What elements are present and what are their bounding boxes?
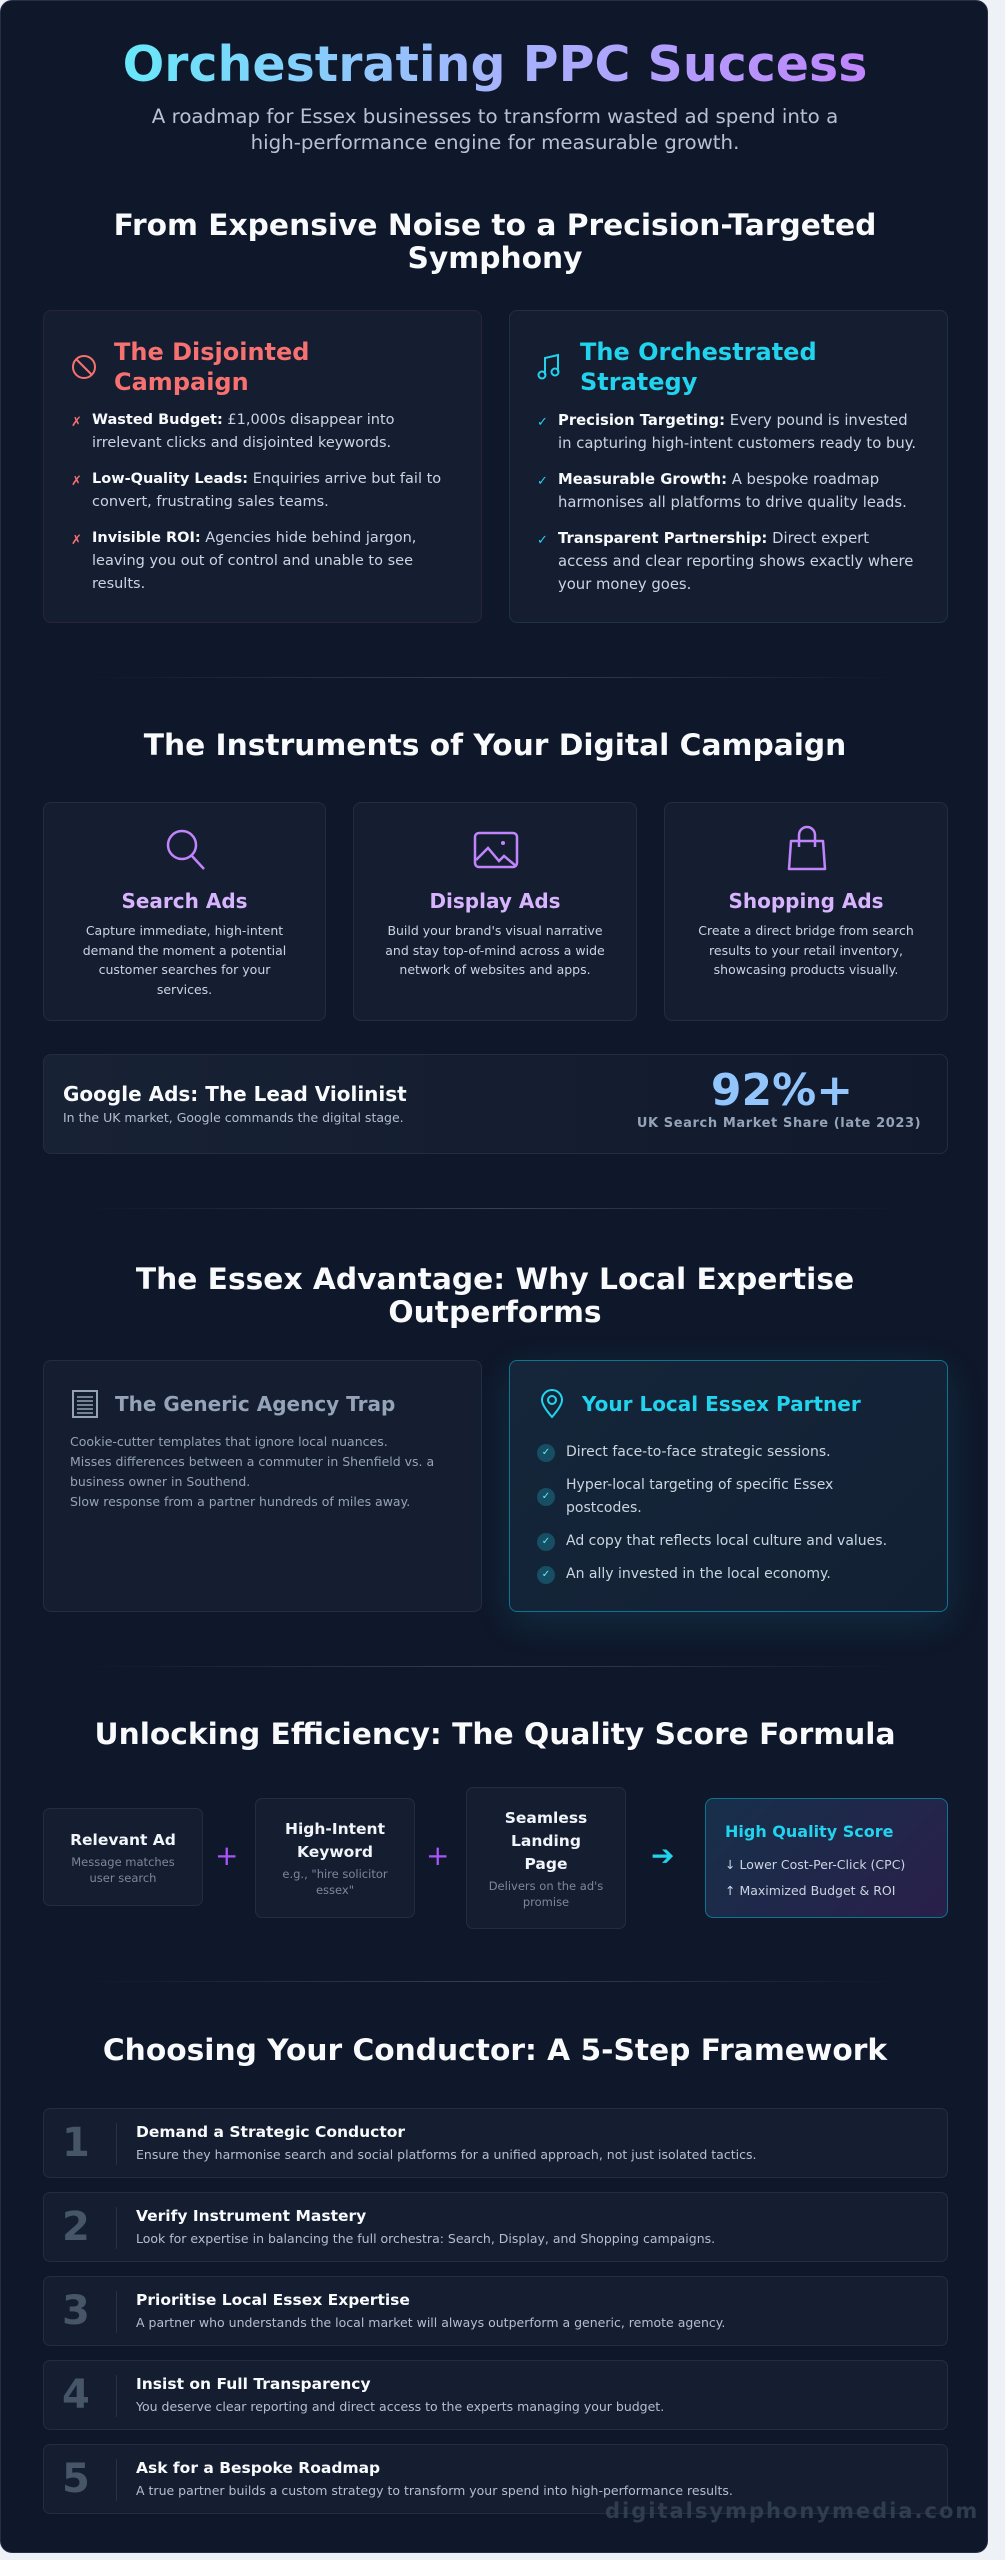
card: search ads xyxy=(43,802,326,1021)
text: Cookie-cutter templates that ignore local nuances. xyxy=(70,1434,388,1449)
formula: keyword: e.g., "hire solicitor xyxy=(282,1867,388,1881)
banner: google ads stat: In the UK market, Google commands the digital stage. xyxy=(63,1110,404,1125)
heading: from noise to symphony: Symphony xyxy=(408,241,582,276)
formula: relevant ad: user search xyxy=(90,1870,156,1884)
step 4: 4 xyxy=(62,2372,90,2418)
bullets: Measurable Growth: A bespoke roadmap xyxy=(558,471,879,488)
panel heading: The Orchestrated xyxy=(580,338,817,366)
subtitle: high-performance engine for measurable growth. xyxy=(251,131,739,154)
bullets: Invisible ROI: Agencies hide behind jargon, leaving you out of control and unable to see results. xyxy=(92,530,416,592)
step 3: Prioritise Local Essex Expertise xyxy=(136,2291,410,2309)
step 1: Demand a Strategic Conductor xyxy=(136,2123,405,2141)
icon: document xyxy=(72,1390,98,1418)
formula: landing page: promise xyxy=(523,1894,569,1908)
heading: The Generic Agency Trap xyxy=(115,1392,395,1416)
formula: result: ↓ Lower Cost-Per-Click (CPC) xyxy=(725,1857,905,1872)
bullets: ✗ xyxy=(71,533,82,548)
icon: music note xyxy=(538,354,560,380)
bullets xyxy=(537,412,916,593)
step 5 xyxy=(43,2444,948,2514)
heading: essex advantage: Outperforms xyxy=(388,1295,602,1330)
checklist: Hyper-local targeting of specific Essex postcodes. xyxy=(566,1477,833,1516)
formula: landing page: Landing xyxy=(511,1832,581,1850)
formula: result xyxy=(705,1798,948,1918)
banner text: Google Ads: The Lead Violinist xyxy=(63,1082,407,1106)
bullets: Precision Targeting: Every pound is invested xyxy=(558,412,908,429)
icon: map pin xyxy=(541,1389,563,1418)
formula: relevant ad: Message matches xyxy=(71,1854,175,1868)
heading: from noise to symphony xyxy=(114,208,876,276)
step 2: 2 xyxy=(62,2204,90,2250)
icon: magnifier xyxy=(166,830,205,870)
heading: Your Local Essex Partner xyxy=(582,1392,861,1416)
step 3: A partner who understands the local market will always outperform a generic, remote agency. xyxy=(136,2315,725,2330)
step 5: A true partner builds a custom strategy to transform your spend into high-performance results. xyxy=(136,2483,733,2498)
arrow: ➔ xyxy=(651,1839,674,1872)
banner: google ads stat: UK Search Market Share (late 2023) xyxy=(637,1116,921,1131)
formula: result: ↑ Maximized Budget & ROI xyxy=(725,1883,895,1898)
step 3 xyxy=(43,2276,948,2346)
card: display ads: Build your brand's visual narrative and stay top-of-mind across a wide network of websites and apps. xyxy=(385,923,605,977)
step 2 xyxy=(43,2192,948,2262)
step 5: 5 xyxy=(62,2456,90,2502)
step 1: Ensure they harmonise search and social platforms for a unified approach, not just isolated tactics. xyxy=(136,2147,756,2162)
card: display ads xyxy=(353,802,637,1021)
panel heading xyxy=(114,338,309,396)
bullets: ✓ xyxy=(537,474,548,489)
step 2: Look for expertise in balancing the full orchestra: Search, Display, and Shopping campaigns. xyxy=(136,2231,715,2246)
formula: landing page: Seamless xyxy=(505,1808,587,1826)
panel: orchestrated strategy xyxy=(509,310,948,623)
bullets: Low-Quality Leads: Enquiries arrive but fail to convert, frustrating sales teams. xyxy=(92,471,441,510)
panel heading: The Disjointed xyxy=(114,338,309,366)
subtitle xyxy=(152,105,838,154)
title: Orchestrating PPC Success xyxy=(123,36,867,93)
panel: disjointed campaign xyxy=(43,310,482,623)
watermark: digitalsymphonymedia.com xyxy=(605,2499,979,2523)
step 4: Insist on Full Transparency xyxy=(136,2375,371,2393)
card: shopping ads xyxy=(664,802,948,1021)
panel heading: Strategy xyxy=(580,368,697,396)
text: Slow response from a partner hundreds of miles away. xyxy=(70,1494,410,1509)
formula: keyword: essex" xyxy=(316,1883,354,1897)
text: Misses differences between a commuter in Shenfield vs. a business owner in Southend. xyxy=(70,1454,434,1489)
heading: quality score: Unlocking Efficiency: The Quality Score Formula xyxy=(94,1717,896,1752)
icon: prohibited xyxy=(72,355,96,379)
step 1: 1 xyxy=(62,2120,90,2166)
bullets xyxy=(71,412,441,592)
heading: 5-step framework: Choosing Your Conductor: A 5-Step Framework xyxy=(103,2033,887,2068)
checklist: ✓ xyxy=(542,1536,550,1547)
checklist: Ad copy that reflects local culture and values. xyxy=(566,1533,887,1549)
step 4: You deserve clear reporting and direct access to the experts managing your budget. xyxy=(136,2399,664,2414)
panel heading xyxy=(580,338,817,396)
plus: + xyxy=(215,1839,238,1872)
checklist: Direct face-to-face strategic sessions. xyxy=(566,1444,831,1460)
formula: relevant ad xyxy=(43,1808,203,1906)
formula: landing page: Delivers on the ad's xyxy=(489,1878,603,1892)
icon: image xyxy=(474,832,518,868)
card: shopping ads: Create a direct bridge from search results to your retail inventory, showcasing products visually. xyxy=(698,923,914,977)
heading: essex advantage: The Essex Advantage: Why Local Expertise xyxy=(136,1262,854,1297)
card: search ads: Search Ads xyxy=(121,889,248,913)
step 4 xyxy=(43,2360,948,2430)
bullets: ✓ xyxy=(537,533,548,548)
bullets: your money goes. xyxy=(558,576,691,593)
formula: keyword xyxy=(255,1798,415,1918)
step 1 xyxy=(43,2108,948,2178)
heading: from noise to symphony: From Expensive Noise to a Precision-Targeted xyxy=(114,208,876,243)
formula: keyword: Keyword xyxy=(297,1843,373,1861)
banner: google ads stat xyxy=(43,1054,948,1154)
icon: bag xyxy=(788,826,826,870)
bullets: access and clear reporting shows exactly where xyxy=(558,553,913,570)
panel: local essex partner xyxy=(509,1360,948,1612)
formula: result: High Quality Score xyxy=(725,1822,893,1841)
subtitle: A roadmap for Essex businesses to transform wasted ad spend into a xyxy=(152,105,838,128)
formula: keyword: High-Intent xyxy=(285,1820,385,1838)
stat 92%: 92%+ xyxy=(711,1065,853,1116)
bullets: Wasted Budget: £1,000s disappear into irrelevant clicks and disjointed keywords. xyxy=(92,412,395,451)
checklist: An ally invested in the local economy. xyxy=(566,1566,831,1582)
bullets: ✗ xyxy=(71,415,82,430)
formula: landing page xyxy=(466,1787,626,1929)
bullets: in capturing high-intent customers ready to buy. xyxy=(558,435,916,452)
card: search ads: Capture immediate, high-intent demand the moment a potential customer searches for your services. xyxy=(83,923,286,996)
panel: generic agency trap xyxy=(43,1360,482,1612)
formula: relevant ad: Relevant Ad xyxy=(70,1830,176,1848)
step 5: Ask for a Bespoke Roadmap xyxy=(136,2459,380,2477)
plus: + xyxy=(426,1839,449,1872)
checklist: ✓ xyxy=(542,1447,550,1458)
text xyxy=(70,1434,434,1509)
step 2: Verify Instrument Mastery xyxy=(136,2207,366,2225)
panel heading: Campaign xyxy=(114,368,249,396)
step 3: 3 xyxy=(62,2288,90,2334)
formula: landing page: Page xyxy=(524,1854,568,1872)
heading: essex advantage xyxy=(136,1262,854,1330)
bullets: harmonises all platforms to drive quality leads. xyxy=(558,494,907,511)
bullets: Transparent Partnership: Direct expert xyxy=(558,530,869,547)
checklist: ✓ xyxy=(542,1491,550,1502)
card: display ads: Display Ads xyxy=(429,889,561,913)
card: shopping ads: Shopping Ads xyxy=(728,889,884,913)
checklist xyxy=(537,1444,887,1584)
bullets: ✓ xyxy=(537,415,548,430)
heading: instruments: The Instruments of Your Digital Campaign xyxy=(144,728,846,763)
checklist: ✓ xyxy=(542,1569,550,1580)
bullets: ✗ xyxy=(71,474,82,489)
